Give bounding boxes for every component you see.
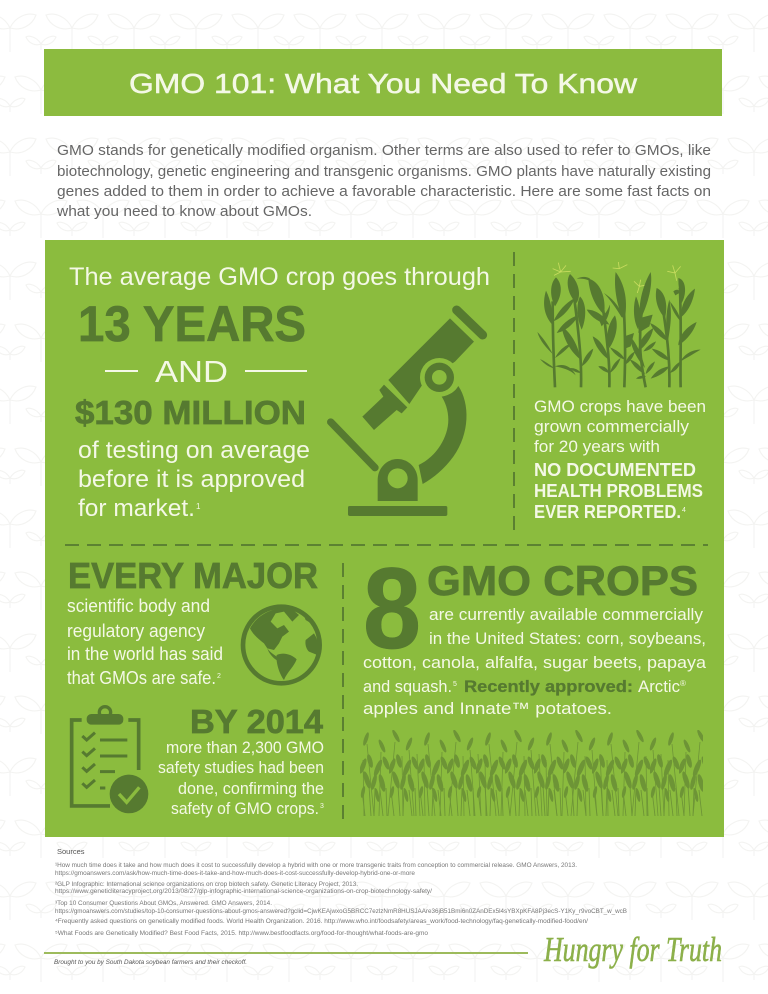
sources list: ²GLP Infographic: International science organizations on crop biotech safety. Genetic Literacy Project, 2013. — [55, 881, 358, 888]
panel: testing headline — [69, 263, 490, 522]
panel: no documented health problems text: HEALTH PROBLEMS — [534, 481, 703, 501]
panel: no documented health problems text: grown commercially — [534, 418, 690, 436]
title banner: GMO 101: What You Need To Know — [129, 68, 638, 99]
icon: globe — [243, 607, 320, 683]
panel: every major scientific body: regulatory agency — [67, 620, 206, 641]
sources list: https://gmoanswers.com/studies/top-10-consumer-questions-about-gmos-answered?gclid=CjwKEAjwxoG5BRCC7ezlzNmR8HUSJAAre36jB51Bmi6n0ZAnDEx5l4sYBXpKFA8Pj3ecS-Y1Ky_r9voCBT_w_wcB — [55, 908, 627, 915]
panel: 8 GMO crops: cotton, canola, alfalfa, sugar beets, papaya — [363, 654, 707, 672]
intro text block — [56, 143, 711, 220]
sources list: ⁴Frequently asked questions on genetically modified foods. World Health Organization. 2016. http://www.who.int/foodsafety/areas_work/food-technology/faq-genetically-modified-food/en/ — [55, 918, 588, 925]
panel: no documented health problems text: NO DOCUMENTED — [534, 460, 696, 480]
panel: testing headline: 13 YEARS — [78, 296, 306, 352]
panel: by 2014 safety studies: BY 2014 — [190, 703, 324, 740]
icon: microscope — [331, 310, 483, 516]
panel: 8 GMO crops: and squash. — [363, 678, 452, 696]
intro text block: biotechnology, genetic engineering and transgenic organisms. GMO plants have naturally existing — [57, 164, 711, 180]
icon: corn plants — [537, 262, 701, 387]
intro text block: what you need to know about GMOs. — [56, 204, 312, 220]
panel: no documented health problems text: GMO crops have been — [534, 398, 706, 416]
panel: by 2014 safety studies: more than 2,300 GMO — [166, 739, 324, 757]
sources list: https://gmoanswers.com/ask/how-much-time-does-it-take-and-how-much-does-it-cost-successfully-develop-hybrid-one-or-more — [55, 870, 416, 877]
panel: 8 GMO crops: Recently approved: — [464, 678, 633, 696]
panel: by 2014 safety studies: safety studies had been — [158, 759, 324, 777]
panel: 8 GMO crops — [363, 545, 707, 718]
panel: testing headline: The average GMO crop goes through — [69, 263, 490, 291]
panel: 8 GMO crops: 8 — [363, 545, 421, 673]
panel: every major scientific body: that GMOs are safe. — [67, 667, 216, 688]
panel: 8 GMO crops: ® — [680, 679, 686, 688]
panel: every major scientific body — [67, 555, 318, 688]
panel: testing headline: before it is approved — [78, 466, 305, 493]
icon: clipboard with checkmark — [72, 707, 150, 815]
panel: every major scientific body: EVERY MAJOR — [68, 555, 318, 596]
panel: no documented health problems text — [534, 398, 706, 522]
panel: by 2014 safety studies: done, confirming the — [178, 780, 324, 798]
panel: no documented health problems text: for 20 years with — [534, 438, 660, 456]
panel: no documented health problems text: EVER REPORTED. — [534, 502, 681, 522]
sources list — [55, 847, 627, 937]
panel: by 2014 safety studies: safety of GMO crops. — [171, 800, 319, 818]
panel: testing headline: AND — [155, 354, 228, 389]
panel: every major scientific body: in the world has said — [67, 643, 223, 664]
panel: 8 GMO crops: in the United States: corn, soybeans, — [429, 630, 706, 648]
panel: testing headline: of testing on average — [78, 437, 310, 464]
sources list: Sources — [57, 847, 85, 856]
sources list: ⁵What Foods are Genetically Modified? Best Food Facts, 2015. http://www.bestfoodfacts.org/food-for-thought/what-foods-are-gmo — [55, 930, 429, 937]
sources list: ¹How much time does it take and how much does it cost to successfully develop a hybrid with one or more transgenic traits from conception to commercial release. GMO Answers, 2013. — [55, 862, 577, 869]
panel: testing headline: for market. — [78, 495, 195, 522]
panel: 8 GMO crops: 5 — [453, 681, 457, 688]
panel: every major scientific body: scientific body and — [67, 595, 210, 616]
main green panel — [45, 240, 724, 837]
panel: no documented health problems text: 4 — [682, 507, 686, 514]
credit line: Brought to you by South Dakota soybean farmers and their checkoff. — [54, 959, 247, 966]
panel: testing headline: $130 MILLION — [75, 394, 306, 431]
panel: by 2014 safety studies: 3 — [320, 803, 324, 810]
panel: testing headline: 1 — [196, 502, 201, 511]
panel: 8 GMO crops: GMO CROPS — [427, 557, 698, 604]
intro text block: GMO stands for genetically modified organism. Other terms are also used to refer to GMOs, like — [57, 143, 711, 159]
panel: 8 GMO crops: apples and Innate™ potatoes. — [363, 700, 612, 718]
title banner — [44, 49, 722, 116]
panel: every major scientific body: 2 — [217, 673, 221, 680]
footer rule — [44, 952, 528, 954]
dashed dividers — [65, 252, 708, 822]
intro text block: genes added to them in order to achieve a favorable characteristic. Here are some fast facts on — [57, 184, 711, 200]
sources list: https://www.geneticliteracyproject.org/2013/08/27/glp-infographic-international-science-organizations-on-crop-biotechnology-safety/ — [55, 888, 432, 895]
illustration: wheat field silhouette — [360, 730, 703, 816]
sources list: ³Top 10 Consumer Questions About GMOs, Answered. GMO Answers, 2014. — [55, 900, 272, 907]
panel: 8 GMO crops: are currently available commercially — [429, 606, 704, 624]
panel: 8 GMO crops: Arctic — [638, 678, 680, 696]
panel: by 2014 safety studies — [158, 703, 324, 818]
